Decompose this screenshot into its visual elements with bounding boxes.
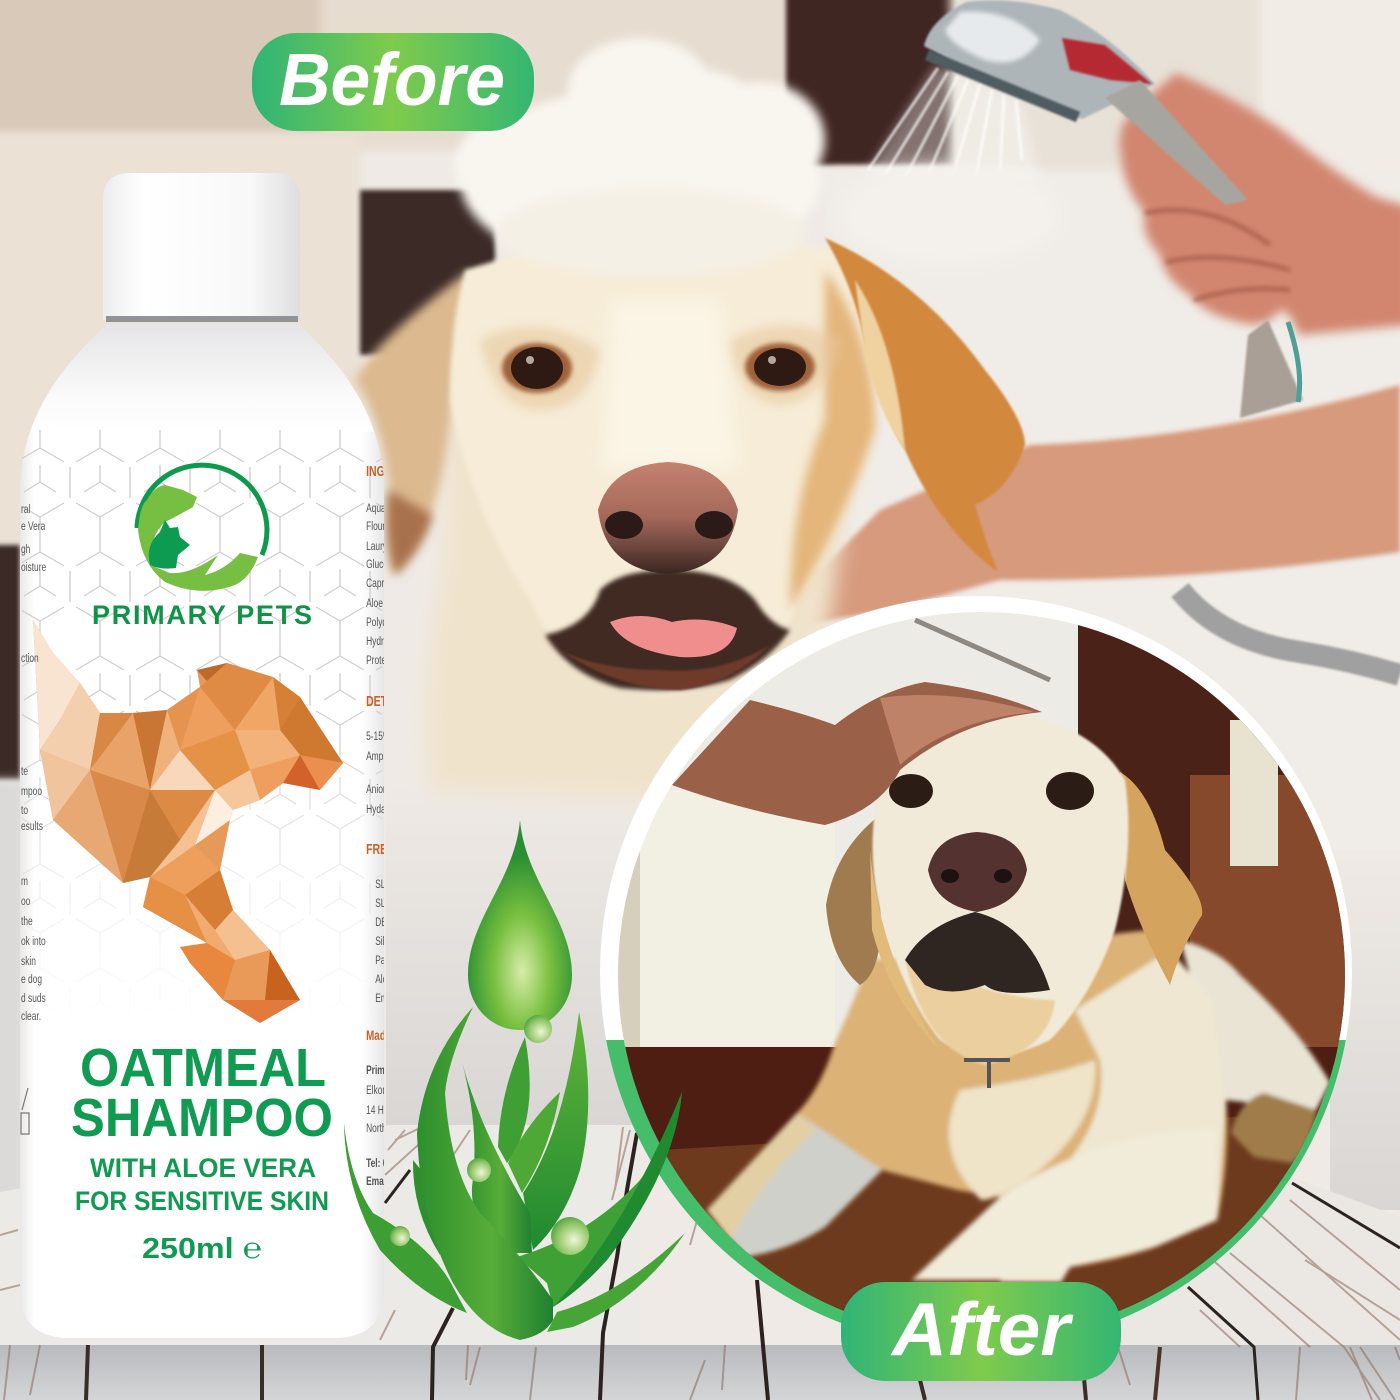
left side label text: e dog bbox=[21, 974, 42, 986]
wooden table top bbox=[0, 1125, 1400, 1400]
left side label text: clear. bbox=[21, 1011, 41, 1023]
left side label text: m bbox=[21, 876, 28, 888]
front edge of table bbox=[0, 1345, 1400, 1400]
left foreleg bbox=[730, 1114, 884, 1258]
hind leg bbox=[1180, 940, 1330, 1110]
left side label text: te bbox=[21, 766, 28, 778]
photo: shower head and hand bbox=[840, 0, 1400, 675]
torso bbox=[795, 928, 1230, 1268]
left side label text: the bbox=[21, 916, 33, 928]
aloe vera plant bbox=[344, 820, 685, 1340]
right side label text: DETE bbox=[366, 692, 394, 709]
dog body and neck bbox=[427, 400, 860, 800]
photo: washing arm bbox=[790, 385, 1400, 625]
right side label text: Tel: 0 bbox=[366, 1158, 388, 1170]
right side label text: Aloe B bbox=[366, 598, 391, 610]
right side label text: Aqua bbox=[366, 503, 386, 515]
eyes bbox=[889, 774, 933, 808]
mist bbox=[840, 165, 1060, 265]
right low leaf bbox=[547, 1233, 685, 1332]
tongue bbox=[610, 616, 737, 657]
right big leaf bbox=[517, 1092, 682, 1307]
hex label pattern bbox=[22, 430, 382, 954]
left side label text: esults bbox=[21, 821, 43, 833]
nose bbox=[928, 832, 1027, 912]
right side label text: Capri bbox=[366, 578, 386, 590]
paw bbox=[1231, 1093, 1316, 1163]
right side label text: Flour bbox=[366, 521, 386, 533]
right side label text: Elkon bbox=[366, 1085, 387, 1097]
collar bbox=[964, 1058, 1010, 1088]
right side label text: Lauryl bbox=[366, 541, 389, 553]
right foreleg bbox=[911, 1157, 1072, 1282]
right side label text: FREE bbox=[366, 840, 394, 857]
left side label text: d suds bbox=[21, 993, 46, 1005]
muzzle bbox=[905, 912, 1050, 993]
right side label text: Gluco bbox=[366, 559, 388, 571]
product bottle bbox=[20, 173, 394, 1338]
right side label text: Made bbox=[366, 1027, 391, 1043]
right side label text bbox=[366, 466, 384, 1185]
left side label text: oisture bbox=[21, 562, 46, 574]
product title: OATMEAL bbox=[80, 1038, 326, 1098]
before pill badge: Before bbox=[279, 38, 505, 121]
right side label text: Sil bbox=[375, 936, 385, 948]
right side label text: Hydro bbox=[366, 636, 389, 648]
right side label text: Prima bbox=[366, 1065, 390, 1077]
muzzle bbox=[545, 570, 790, 690]
green oil drop bbox=[468, 820, 572, 1030]
right side label text: Polyq bbox=[366, 617, 387, 629]
water bubbles bbox=[390, 1015, 589, 1255]
left side label text: to bbox=[21, 805, 28, 817]
right side label text: Protei bbox=[366, 655, 388, 667]
right ear bbox=[825, 238, 1025, 572]
right side label text: Pa bbox=[375, 955, 386, 967]
cabinets bbox=[648, 828, 650, 832]
right side label text: Alc bbox=[375, 974, 387, 986]
product title bbox=[71, 1038, 333, 1148]
left side label text bbox=[21, 504, 46, 1023]
chrome head bbox=[924, 0, 1155, 119]
left side label text: ral bbox=[21, 504, 30, 516]
left side label text: gh bbox=[21, 544, 31, 556]
right side label text: North bbox=[366, 1123, 387, 1135]
head bbox=[450, 234, 875, 695]
right side label text: 5-15% bbox=[366, 731, 390, 743]
tall right leaf bbox=[523, 1012, 588, 1250]
left ear bbox=[355, 270, 470, 575]
circle frame bbox=[600, 596, 1352, 1348]
right side label text: SL bbox=[375, 879, 386, 891]
left leaf bbox=[344, 1123, 467, 1313]
center second leaf bbox=[508, 1092, 560, 1193]
bottle body bbox=[20, 324, 384, 1338]
product subtitle: WITH ALOE VERA bbox=[90, 1153, 316, 1183]
right ear bbox=[1120, 772, 1202, 985]
dog body bbox=[707, 930, 1330, 1282]
volume: 250ml ℮ bbox=[142, 1233, 262, 1265]
recycling icon bbox=[21, 1088, 29, 1134]
hand bbox=[1120, 73, 1400, 335]
bottle cap bbox=[103, 173, 300, 322]
nose bbox=[598, 462, 738, 574]
head bbox=[872, 712, 1128, 1055]
water spray bbox=[865, 65, 1040, 185]
handle bbox=[1105, 80, 1248, 205]
center narrow leaf bbox=[498, 1037, 530, 1163]
right side label text: Hydant bbox=[366, 804, 393, 816]
back leaf bbox=[413, 1160, 445, 1255]
left side label text: ok into bbox=[21, 936, 46, 948]
product subtitle: FOR SENSITIVE SKIN bbox=[75, 1186, 329, 1216]
low poly dog illustration bbox=[33, 620, 343, 1023]
left side label text: mpoo bbox=[21, 786, 42, 798]
right side label text: INGR bbox=[366, 462, 393, 479]
after pill badge bbox=[841, 1282, 1121, 1381]
right side label text: Ampho bbox=[366, 751, 393, 763]
right side label text: Em bbox=[375, 993, 388, 1005]
main leaf bbox=[417, 1007, 553, 1340]
product title: SHAMPOO bbox=[71, 1088, 333, 1148]
floor bbox=[625, 1047, 1338, 1312]
circular after photo bbox=[618, 612, 1345, 1312]
right side label text: SL bbox=[375, 898, 386, 910]
left side label text: skin bbox=[21, 956, 36, 968]
eyes bbox=[502, 343, 815, 393]
brand logo bbox=[137, 465, 267, 591]
left side label text: e Vera bbox=[21, 521, 45, 533]
dark door bbox=[1078, 625, 1358, 1065]
center left leaf bbox=[462, 1062, 532, 1253]
hose bbox=[1180, 590, 1400, 675]
foam bbox=[455, 38, 825, 277]
brand name: PRIMARY PETS bbox=[92, 600, 312, 630]
petting arm bbox=[672, 682, 1042, 825]
right side label text: DE bbox=[375, 917, 387, 929]
photo: wet dog under foam bbox=[355, 38, 1025, 800]
left side label text: ction bbox=[21, 653, 39, 665]
left ear bbox=[826, 815, 881, 985]
after pill badge: After bbox=[890, 1287, 1074, 1371]
product subtitle bbox=[75, 1153, 329, 1216]
right side label text: 14 Hug bbox=[366, 1105, 393, 1117]
right side label text: Email bbox=[366, 1176, 389, 1188]
right side label text: Anionic bbox=[366, 784, 394, 796]
left side label text: oo bbox=[21, 896, 31, 908]
